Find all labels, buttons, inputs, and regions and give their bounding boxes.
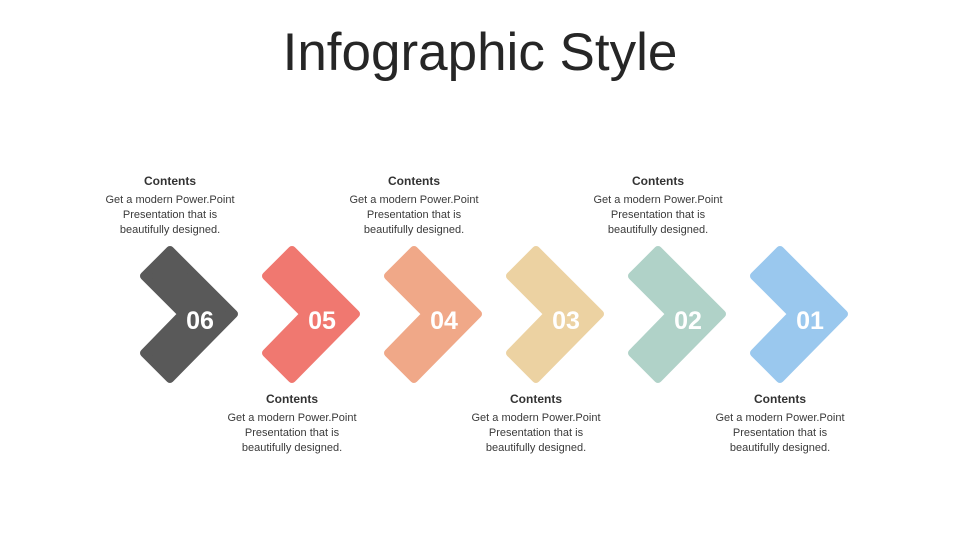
chevron 02 [632, 250, 722, 379]
chevron 03 [510, 250, 600, 379]
chevron 03: 03 [552, 307, 580, 335]
chevron 05: 05 [308, 307, 336, 335]
text: 03 [471, 392, 600, 454]
text: 06: Contents [144, 174, 196, 188]
text: 06: Get a modern Power.Point Presentation that is beautifully designed. [105, 194, 234, 236]
text: 01: Get a modern Power.Point Presentation that is beautifully designed. [715, 412, 844, 454]
text: 05: Get a modern Power.Point Presentation that is beautifully designed. [227, 412, 356, 454]
text: 01 [715, 392, 844, 454]
text: 06 [105, 174, 234, 236]
chevron 01 [754, 250, 844, 379]
text: 04: Contents [388, 174, 440, 188]
text: 02 [593, 174, 722, 236]
text: 04 [349, 174, 478, 236]
text: 05 [227, 392, 356, 454]
chevron 06: 06 [186, 307, 214, 335]
title: Infographic Style [283, 23, 677, 82]
chevron 02: 02 [674, 307, 702, 335]
chevron 06 [144, 250, 234, 379]
text: 03: Contents [510, 392, 562, 406]
chevron 01: 01 [796, 307, 824, 335]
text: 01: Contents [754, 392, 806, 406]
text: 05: Contents [266, 392, 318, 406]
chevron 05 [266, 250, 356, 379]
chevron 04: 04 [430, 307, 458, 335]
text: 02: Contents [632, 174, 684, 188]
text: 02: Get a modern Power.Point Presentation that is beautifully designed. [593, 194, 722, 236]
text: 03: Get a modern Power.Point Presentation that is beautifully designed. [471, 412, 600, 454]
text: 04: Get a modern Power.Point Presentation that is beautifully designed. [349, 194, 478, 236]
chevron 04 [388, 250, 478, 379]
